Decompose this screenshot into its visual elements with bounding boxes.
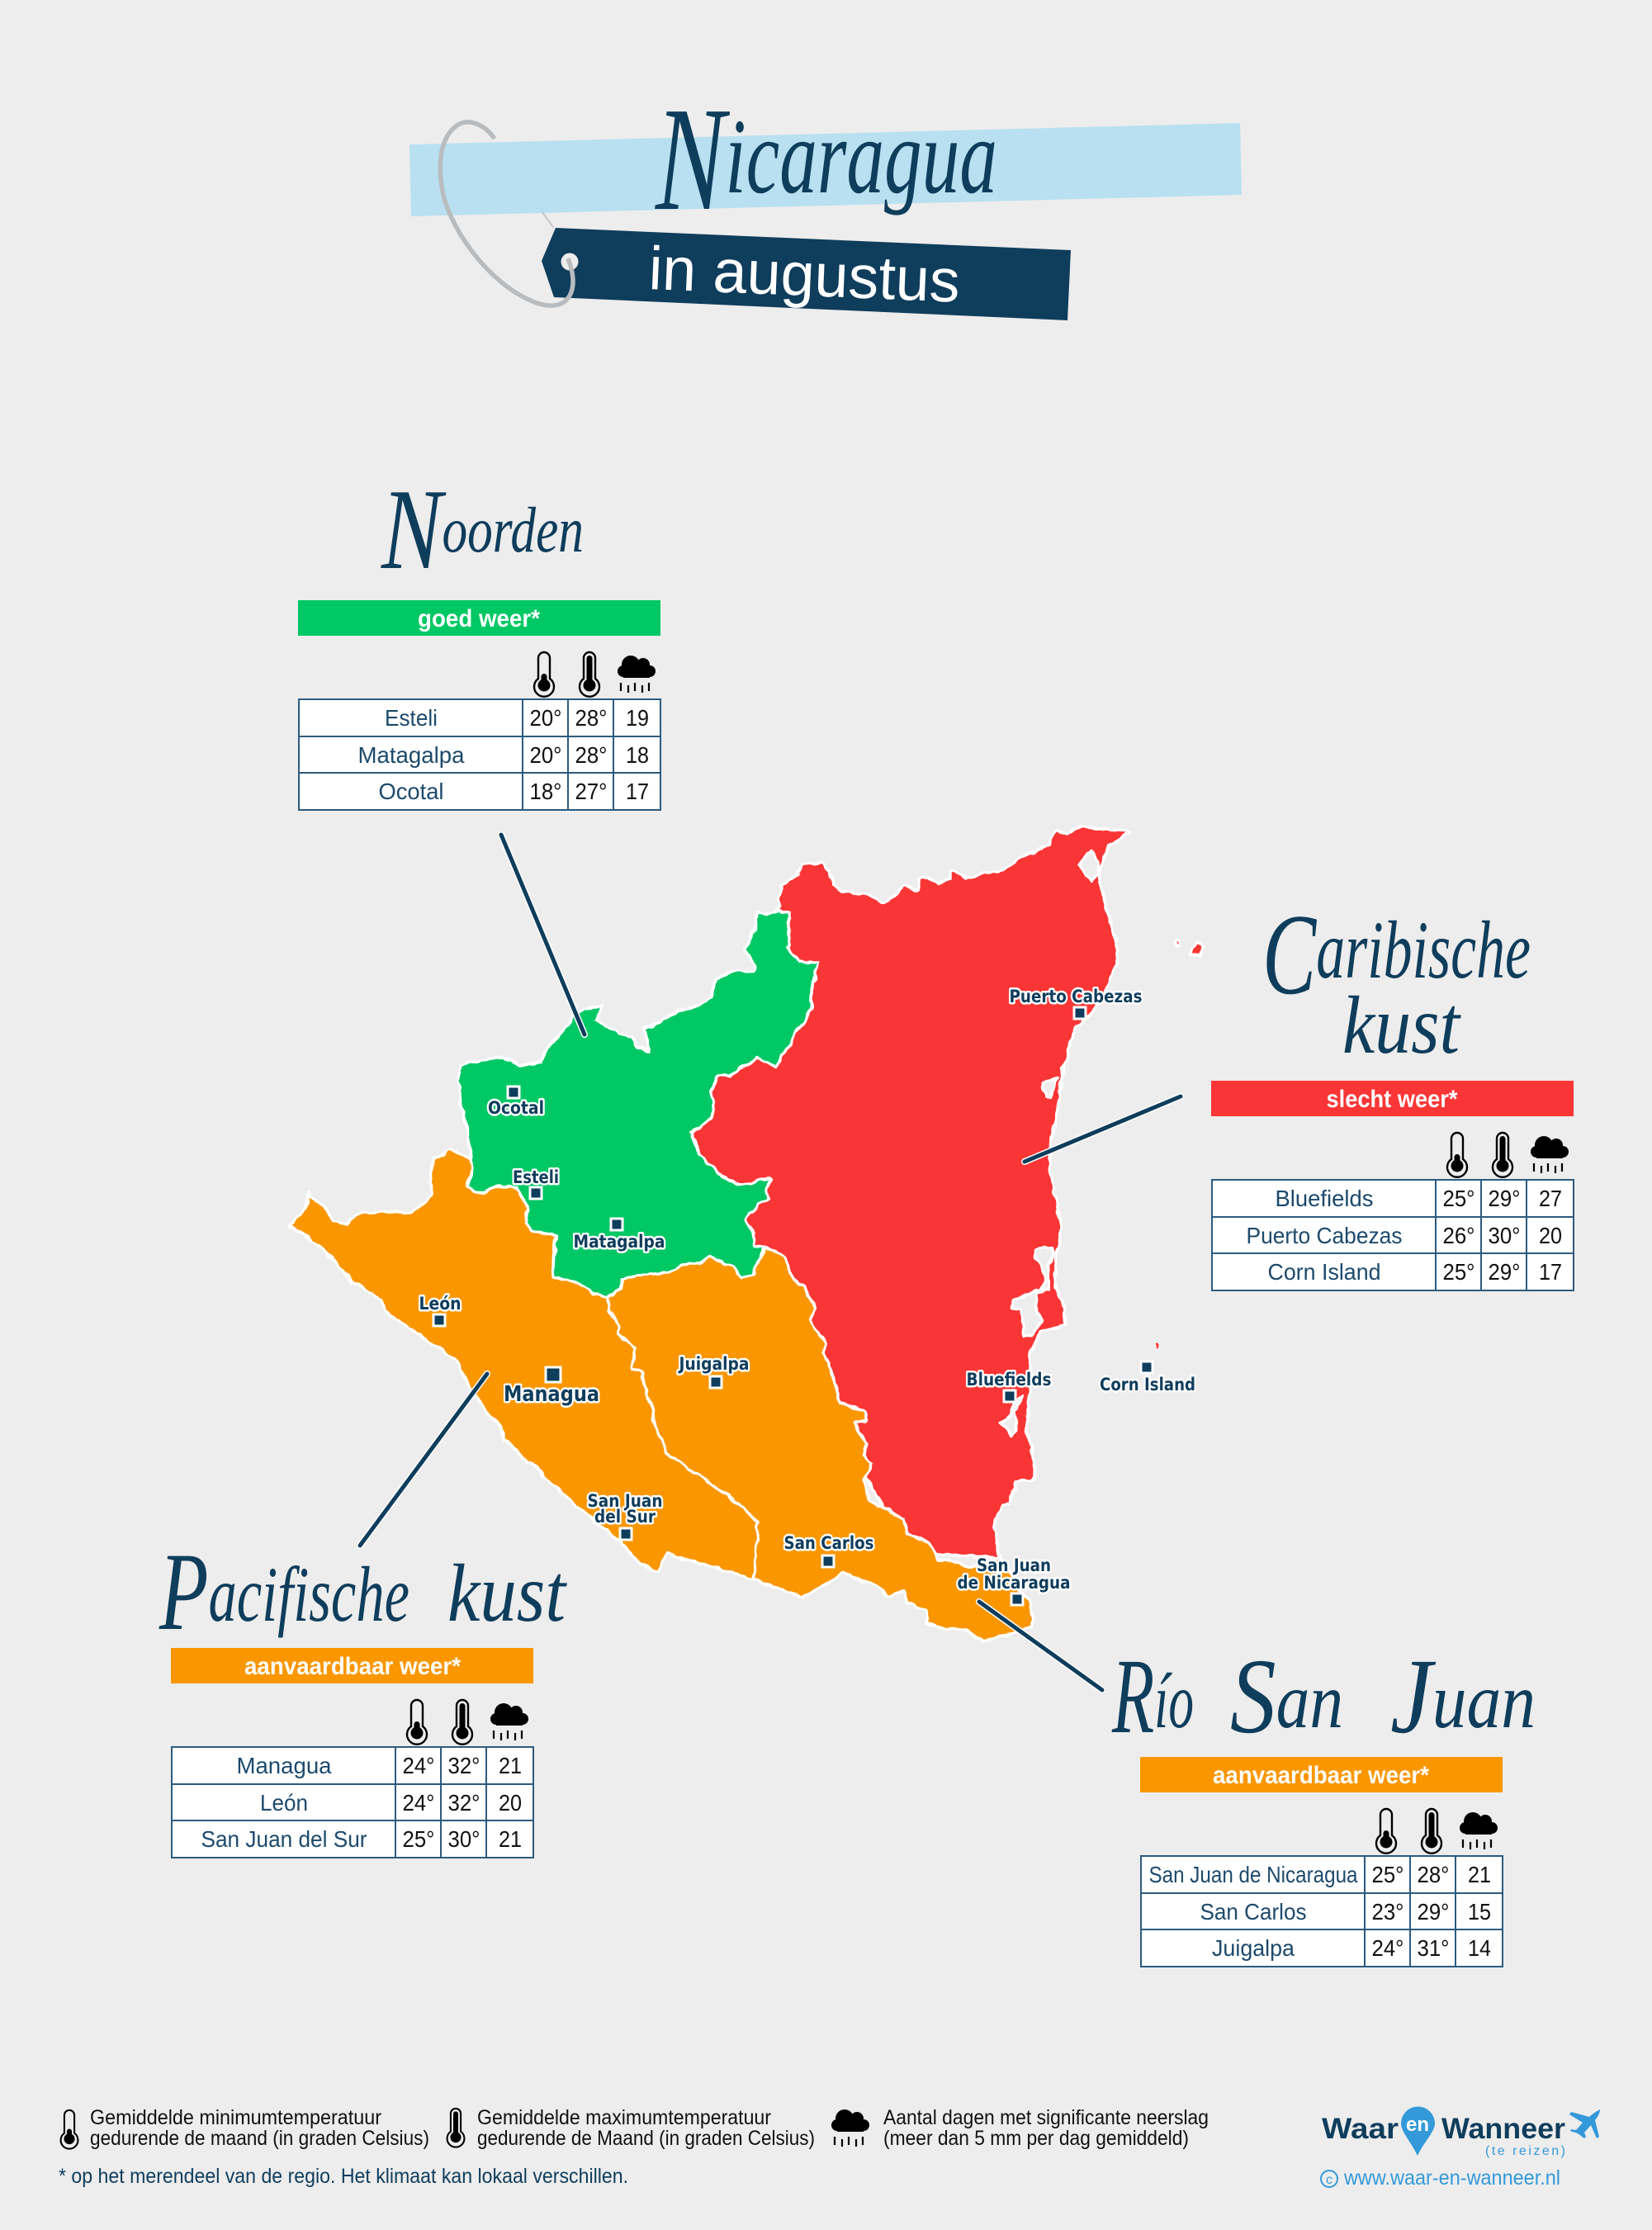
legend: minimum temperature	[61, 2106, 429, 2150]
table: Juigalpa	[1212, 1935, 1295, 1961]
table: San Juan del Sur	[201, 1826, 367, 1852]
heading: Pacifische kust: P	[159, 1531, 208, 1654]
heading: Río San Juan: J	[1390, 1637, 1436, 1756]
region: Noorden	[457, 910, 818, 1298]
table: 17	[626, 779, 649, 804]
tag hole	[561, 253, 578, 271]
city: San Juan de Nicaragua: de Nicaragua	[958, 1573, 1070, 1593]
table: 30°	[1488, 1223, 1521, 1248]
heading: Caribische kust: aribische	[1316, 904, 1531, 996]
table: 31°	[1417, 1935, 1450, 1961]
heading: Río San Juan: uan	[1432, 1657, 1536, 1745]
table: 20°	[530, 742, 561, 768]
legend: minimum temperature: Gemiddelde minimumtemperatuur	[90, 2106, 381, 2129]
panel: Caribische kust	[1211, 891, 1574, 1290]
table: 17	[1539, 1259, 1562, 1285]
city: San Juan del Sur: del Sur	[594, 1507, 656, 1527]
table: 27	[1539, 1186, 1562, 1211]
icons	[407, 1700, 528, 1745]
table: 28°	[1417, 1862, 1450, 1887]
city: Corn Island	[1100, 1361, 1195, 1394]
legend: maximum temperature: Gemiddelde maximumtemperatuur	[477, 2106, 771, 2129]
subtitle: in augustus: in augustus	[647, 234, 961, 315]
weather band: aanvaardbaar weer*	[1213, 1762, 1429, 1789]
website: c	[1326, 2173, 1332, 2187]
city: San Carlos	[784, 1533, 873, 1567]
weather band	[1211, 1081, 1574, 1116]
table: 28°	[575, 705, 608, 731]
table: Esteli	[385, 705, 438, 731]
website: www.waar-en-wanneer.nl	[1343, 2166, 1560, 2190]
weather band: goed weer*	[418, 605, 540, 632]
region: Pacifische kust and Rio San Juan	[290, 1150, 1034, 1641]
callout line: Rio San Juan	[979, 1602, 1102, 1690]
city: San Carlos: San Carlos	[784, 1533, 873, 1553]
panel: Pacifische kust	[159, 1531, 567, 1858]
table: Puerto Cabezas	[1247, 1223, 1402, 1248]
table: 30°	[447, 1826, 480, 1852]
callout line: Pacifische kust	[360, 1374, 487, 1546]
region: Caribische kust	[660, 826, 1203, 1558]
footnote: * op het merendeel van de regio. Het klimaat kan lokaal verschillen.	[59, 2165, 628, 2188]
table: Bluefields	[1275, 1186, 1374, 1211]
icons	[1376, 1809, 1498, 1854]
table: 18°	[530, 779, 561, 804]
heading: Río San Juan	[1111, 1637, 1536, 1756]
city: San Juan del Sur	[588, 1491, 662, 1540]
table: 24°	[1372, 1935, 1403, 1961]
city: Juigalpa: Juigalpa	[678, 1354, 750, 1374]
weather band	[1140, 1757, 1503, 1792]
table	[1212, 1180, 1574, 1290]
weather band: slecht weer*	[1326, 1086, 1458, 1113]
heading: Pacifische kust	[159, 1531, 567, 1654]
heading: Pacifische kust: kust	[447, 1547, 567, 1639]
city: Puerto Cabezas	[1009, 987, 1143, 1019]
city: San Juan del Sur: San Juan	[588, 1491, 662, 1511]
logo: Waar en Wanneer: (te reizen)	[1485, 2144, 1565, 2158]
heading: Caribische kust: kust	[1342, 979, 1461, 1071]
legend: maximum temperature: gedurende de Maand (in graden Celsius)	[477, 2127, 815, 2150]
callout line: Caribische kust	[1025, 1096, 1181, 1162]
city: Puerto Cabezas: Puerto Cabezas	[1009, 987, 1143, 1006]
table: San Juan de Nicaragua	[1149, 1862, 1358, 1887]
table: San Carlos	[1200, 1899, 1306, 1925]
panel: Noorden	[298, 466, 660, 810]
city: Managua	[504, 1367, 599, 1407]
heading: Río San Juan: S	[1230, 1637, 1276, 1756]
legend: rain days	[831, 2106, 1209, 2150]
heading: Caribische kust: C	[1262, 891, 1317, 1019]
heading: Río San Juan: an	[1276, 1657, 1343, 1745]
table: 20	[1539, 1223, 1562, 1248]
city: Corn Island: Corn Island	[1100, 1375, 1195, 1394]
logo: Waar en Wanneer: Wanneer	[1441, 2113, 1565, 2145]
city: Matagalpa	[573, 1219, 665, 1252]
table: Ocotal	[378, 779, 444, 804]
city: Managua: Managua	[504, 1382, 599, 1407]
icons	[1447, 1133, 1569, 1177]
legend: maximum temperature	[447, 2106, 815, 2150]
table: 15	[1468, 1899, 1491, 1925]
table: 24°	[403, 1753, 434, 1778]
icon: location pin	[1401, 2107, 1435, 2156]
table: 20°	[530, 705, 561, 731]
city: San Juan de Nicaragua: San Juan	[977, 1555, 1051, 1575]
legend: minimum temperature: gedurende de maand (in graden Celsius)	[90, 2127, 429, 2150]
icons	[534, 652, 656, 697]
title: Nicaragua: N	[655, 77, 731, 241]
panel: Río San Juan	[1111, 1637, 1536, 1967]
table: 14	[1468, 1935, 1491, 1961]
tag string	[542, 212, 553, 227]
city: León: León	[419, 1294, 461, 1314]
table: 25°	[1372, 1862, 1403, 1887]
title band	[409, 123, 1242, 216]
table: 23°	[1372, 1899, 1403, 1925]
table: 29°	[1488, 1259, 1521, 1285]
table	[299, 699, 660, 810]
table: 27°	[575, 779, 608, 804]
heading: Noorden: N	[380, 466, 447, 594]
subtitle tag	[542, 228, 1071, 320]
weather band: aanvaardbaar weer*	[244, 1653, 461, 1680]
heading: Caribische kust	[1262, 891, 1531, 1071]
table: 28°	[575, 742, 608, 768]
city: Bluefields	[966, 1370, 1052, 1402]
table: 25°	[1443, 1259, 1474, 1285]
heading: Río San Juan: R	[1111, 1637, 1154, 1756]
table: Managua	[236, 1753, 332, 1778]
table: 21	[1468, 1862, 1491, 1887]
table: 20	[499, 1790, 522, 1816]
callout line: Noorden	[501, 835, 585, 1035]
table: 21	[499, 1826, 522, 1852]
table: 26°	[1443, 1223, 1474, 1248]
logo: Waar en Wanneer: Waar	[1322, 2113, 1399, 2145]
icon: plane	[1569, 2109, 1600, 2138]
weather band	[298, 600, 660, 636]
legend: rain days: (meer dan 5 mm per dag gemiddeld)	[883, 2127, 1189, 2150]
city: Matagalpa: Matagalpa	[573, 1232, 665, 1252]
table	[172, 1747, 533, 1858]
table: 24°	[403, 1790, 434, 1816]
table: 25°	[403, 1826, 434, 1852]
title	[409, 77, 1242, 320]
table: 32°	[447, 1790, 480, 1816]
table: Matagalpa	[358, 742, 465, 768]
city: Esteli: Esteli	[513, 1167, 559, 1187]
table: 29°	[1417, 1899, 1450, 1925]
heading: Pacifische kust: acifische	[208, 1551, 409, 1638]
table	[1141, 1856, 1503, 1967]
table: 29°	[1488, 1186, 1521, 1211]
city: Ocotal: Ocotal	[488, 1098, 544, 1118]
city: Bluefields: Bluefields	[966, 1370, 1052, 1390]
tag ring	[440, 122, 573, 305]
city: Esteli	[513, 1167, 559, 1199]
table: 25°	[1443, 1186, 1474, 1211]
heading: Río San Juan: ío	[1154, 1657, 1194, 1745]
table: Corn Island	[1268, 1259, 1380, 1285]
legend: rain days: Aantal dagen met significante neerslag	[883, 2106, 1209, 2129]
table: León	[260, 1790, 308, 1816]
icon: location pin: en	[1406, 2114, 1429, 2136]
city: Juigalpa	[678, 1354, 750, 1388]
table: 18	[626, 742, 649, 768]
map of Nicaragua	[290, 826, 1203, 1641]
table: 19	[626, 705, 649, 731]
city: San Juan de Nicaragua	[958, 1555, 1070, 1605]
table: 32°	[447, 1753, 480, 1778]
city: León	[419, 1294, 461, 1326]
heading: Noorden: oorden	[442, 494, 584, 566]
legend	[59, 2106, 1209, 2188]
title: Nicaragua: icaragua	[725, 97, 997, 216]
weather band	[171, 1648, 533, 1683]
table: 21	[499, 1753, 522, 1778]
logo: Waar en Wanneer	[1321, 2107, 1600, 2190]
city: Ocotal	[488, 1087, 544, 1118]
